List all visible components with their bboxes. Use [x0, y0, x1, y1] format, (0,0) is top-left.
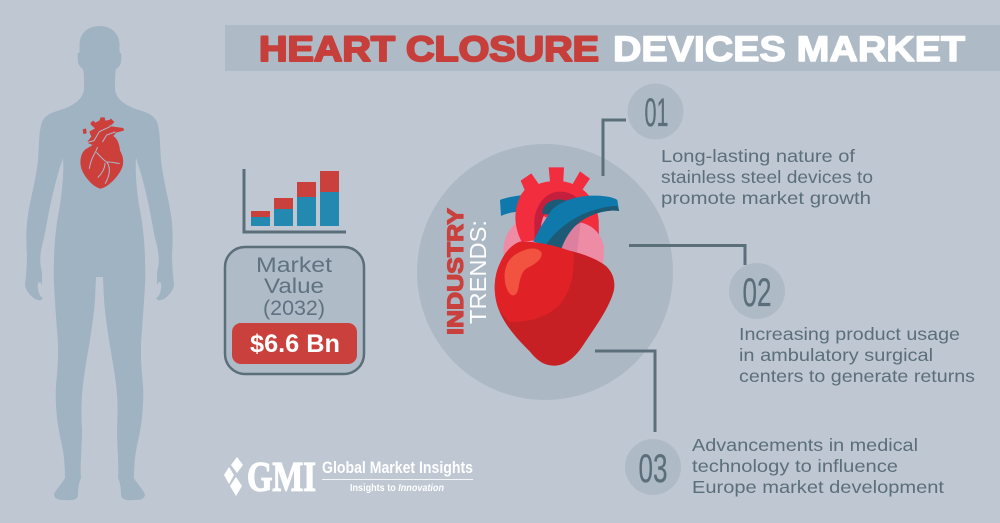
title band: HEART CLOSURE [259, 30, 599, 69]
logo: Global Market Insights: Global Market Insights [322, 458, 473, 477]
market value box: (2032) [263, 297, 325, 320]
connector 03 [595, 351, 655, 432]
market value box [225, 247, 364, 374]
logo: Global Market Insights: GMI [247, 455, 316, 501]
market value box: Value [264, 275, 324, 298]
trend 01: stainless steel devices to [661, 167, 873, 187]
trend 01: Long-lasting nature of [661, 146, 855, 166]
trend 02 [729, 263, 975, 386]
trend 01: 01 [644, 91, 668, 135]
human body silhouette [25, 26, 174, 500]
bar chart icon [244, 169, 346, 232]
logo: Global Market Insights [224, 455, 473, 501]
trend 02: 02 [742, 271, 772, 315]
icon: large heart [495, 167, 619, 366]
trend 02: centers to generate returns [739, 366, 975, 386]
title band [225, 25, 1000, 71]
market value box: $6.6 Bn [250, 330, 340, 358]
connector 02 [629, 246, 745, 265]
title band: DEVICES MARKET [613, 30, 965, 69]
trend 03: Europe market development [692, 477, 944, 497]
logo: Global Market Insights: Insights to Innovation [350, 483, 444, 494]
icon: small anatomical heart [80, 117, 124, 189]
heading: industry trends: INDUSTRY [443, 208, 468, 335]
industry trends circle [417, 144, 673, 400]
trend 02: in ambulatory surgical [739, 345, 933, 365]
trend 01: promote market growth [661, 188, 871, 208]
trend 01 [628, 84, 873, 208]
connector 01 [603, 120, 626, 176]
trend 03 [625, 435, 944, 497]
heading: industry trends: TRENDS: [465, 220, 491, 324]
market value box: Market [256, 254, 332, 277]
trend 03: Advancements in medical [692, 435, 918, 455]
heading: industry trends [443, 208, 491, 335]
trend 03: technology to influence [692, 456, 898, 476]
trend 02: Increasing product usage [739, 324, 960, 344]
trend 03: 03 [638, 447, 668, 491]
